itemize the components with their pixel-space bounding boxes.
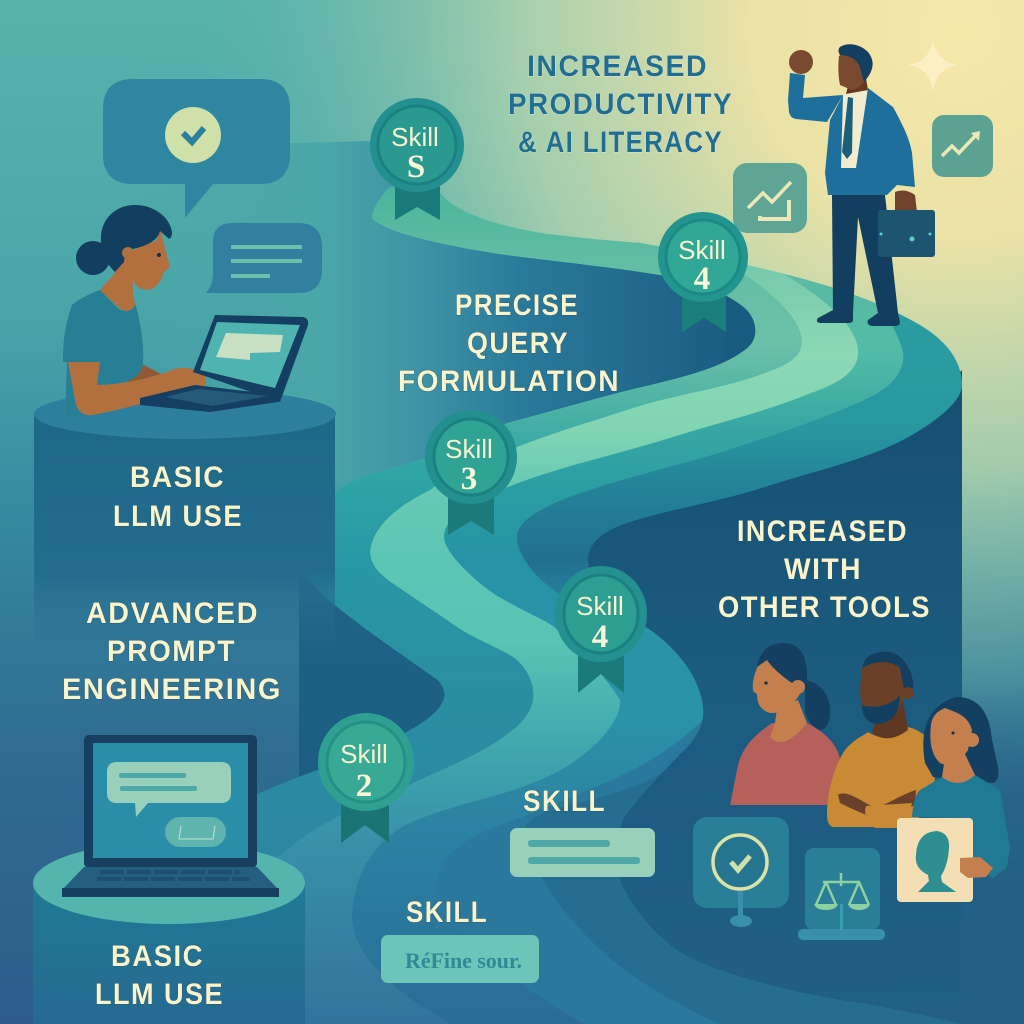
lower plinth with laptop — [33, 735, 305, 1024]
heading: advanced prompt engineering: ENGINEERING — [62, 673, 282, 706]
label: skill with refine card: SKILL — [406, 896, 488, 929]
woman at laptop — [63, 205, 308, 417]
hair — [101, 205, 172, 272]
icon tile: checkmark target — [693, 817, 789, 927]
lower plinth label: LLM USE — [95, 978, 224, 1011]
lower plinth label: BASIC — [111, 940, 204, 973]
heading: increased with other tools: INCREASED — [737, 515, 908, 548]
upper plinth with heading: basic LLM use — [34, 389, 336, 655]
heading: advanced prompt engineering: PROMPT — [107, 635, 236, 668]
badge: skill 3: 3 — [461, 461, 477, 497]
head — [838, 53, 872, 90]
label: skill with refine card — [381, 896, 539, 983]
badge: skill 3: Skill — [445, 434, 493, 464]
label: skill with text card — [510, 785, 655, 877]
plinth label: LLM USE — [113, 500, 243, 533]
woman in red shirt — [730, 643, 840, 805]
shirt — [840, 88, 868, 170]
hair — [838, 44, 873, 82]
plinth label: BASIC — [130, 461, 225, 494]
heading: increased with other tools: OTHER TOOLS — [718, 591, 931, 624]
badge: skill 2: Skill — [340, 739, 388, 769]
group of three colleagues — [730, 643, 1010, 878]
speech bubble with check — [103, 79, 290, 218]
badge: skill S — [370, 98, 464, 220]
badge: skill 2: 2 — [356, 768, 372, 804]
heading: increased with other tools: WITH — [784, 553, 862, 586]
jacket — [825, 88, 915, 195]
label: skill with refine card: RéFine sour. — [405, 948, 522, 973]
heading: increased productivity and AI literacy: PRODUCTIVITY — [508, 88, 733, 121]
neck — [846, 78, 868, 94]
trousers — [817, 195, 900, 326]
front laptop — [62, 735, 279, 897]
badge: skill 4 lower: Skill — [576, 591, 624, 621]
badge: skill S: Skill — [391, 122, 439, 152]
heading: increased productivity and AI literacy: INCREASED — [527, 50, 708, 83]
briefcase — [878, 210, 935, 257]
heading: precise query formulation: FORMULATION — [398, 365, 620, 398]
near arm — [68, 362, 206, 415]
badge: skill 4 upper: 4 — [694, 261, 710, 297]
growth tile left — [733, 163, 807, 233]
badge: skill S: S — [407, 149, 425, 185]
small speech bubble with lines — [206, 223, 322, 293]
dark right cliff — [560, 370, 1024, 1024]
neck and face — [100, 228, 170, 311]
woman holding portrait — [912, 697, 1010, 878]
heading: increased productivity and AI literacy — [508, 50, 733, 159]
man in mustard shirt — [827, 652, 935, 828]
icon tile: balance scale — [798, 848, 885, 940]
raised arm — [788, 73, 843, 122]
heading: advanced prompt engineering — [62, 597, 282, 706]
heading: precise query formulation: QUERY — [467, 327, 569, 360]
badge: skill 4 upper: Skill — [678, 235, 726, 265]
hand on portrait card — [960, 857, 993, 878]
badge: skill 3 — [425, 410, 517, 535]
badge: skill 4 lower — [555, 566, 647, 693]
heading: advanced prompt engineering: ADVANCED — [86, 597, 259, 630]
heading: precise query formulation — [398, 289, 620, 398]
hand — [895, 191, 917, 212]
heading: precise query formulation: PRECISE — [455, 289, 579, 322]
badge: skill 4 lower: 4 — [592, 619, 608, 655]
plinth label — [113, 461, 243, 533]
tie — [842, 97, 853, 159]
growth tile right — [932, 115, 993, 177]
badge: skill 2 — [318, 713, 414, 843]
businessman with briefcase — [788, 44, 935, 326]
heading: increased with other tools — [718, 515, 931, 624]
fist — [789, 50, 813, 74]
laptop — [140, 315, 308, 412]
badge: skill 4 upper — [658, 212, 748, 332]
sparkle — [908, 38, 958, 92]
t-shirt — [63, 290, 143, 417]
heading: increased productivity and AI literacy: & AI LITERACY — [518, 126, 723, 159]
hill behind the road — [100, 140, 800, 820]
portrait card — [897, 818, 973, 902]
far arm — [125, 363, 175, 392]
winding skill road — [257, 187, 962, 1024]
label: skill with text card: SKILL — [523, 785, 606, 818]
lower plinth label — [95, 940, 224, 1011]
